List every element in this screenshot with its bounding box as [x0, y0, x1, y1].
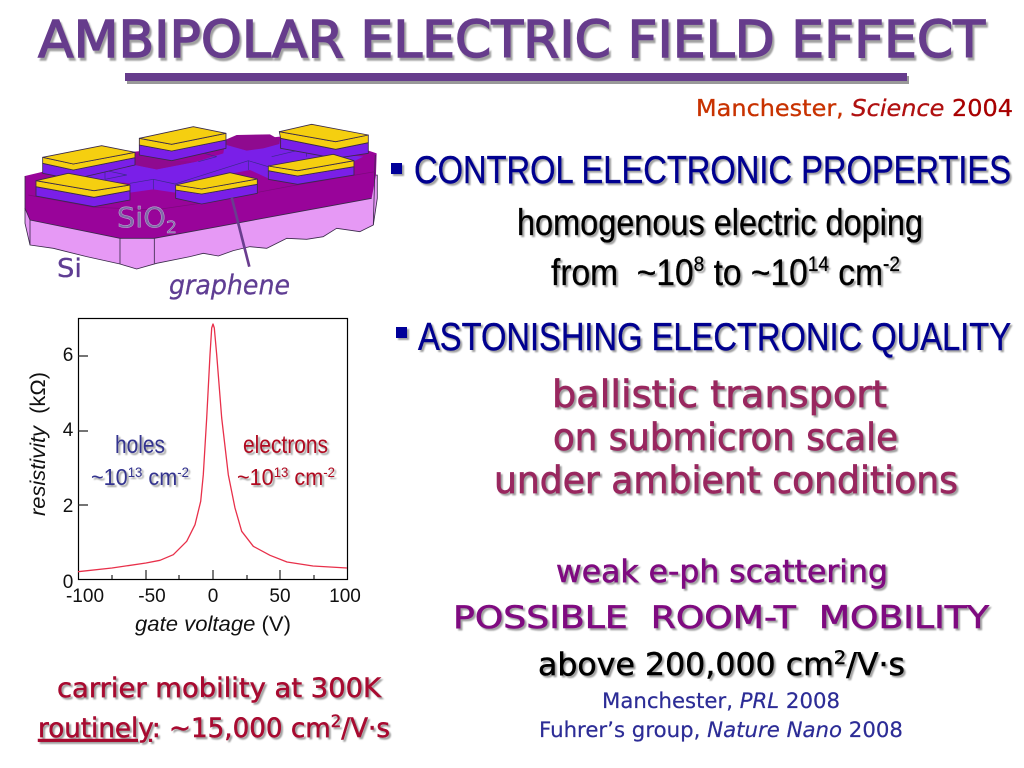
mobility note: /V·s	[341, 713, 390, 744]
y tick labels: 2	[63, 496, 73, 517]
doping text: -2	[883, 253, 900, 276]
holes annotation: ~10	[91, 464, 130, 490]
ballistic transport text: on submicron scale	[553, 416, 898, 459]
citations 2008: Fuhrer’s group, Nature Nano 2008	[539, 718, 903, 742]
mobility note: routinely: ~15,000 cm	[38, 713, 336, 744]
x tick labels	[66, 586, 361, 607]
x tick labels: -100	[66, 586, 104, 607]
y tick labels: 6	[63, 345, 73, 366]
contact: top right	[279, 124, 368, 158]
graphene flake	[73, 140, 363, 193]
x tick labels: 50	[269, 586, 291, 607]
holes annotation	[91, 431, 189, 490]
plot frame	[78, 318, 348, 580]
contact: top left	[43, 146, 135, 179]
electrons annotation: electrons	[243, 431, 328, 459]
electrons annotation: ~10	[237, 464, 276, 490]
doping text: 8	[694, 253, 704, 276]
section: control electronic properties	[391, 149, 1011, 293]
mobility note: 2	[331, 712, 341, 732]
ballistic transport text: ballistic transport	[552, 373, 887, 416]
electrons annotation: -2	[323, 464, 335, 480]
exposed oxide patches	[225, 134, 280, 151]
weak scattering text: POSSIBLE ROOM-T MOBILITY	[453, 600, 989, 636]
mobility value: /V·s	[846, 647, 905, 683]
ballistic transport text: under ambient conditions	[494, 459, 958, 502]
contact: top middle	[139, 127, 226, 161]
electrons annotation: 13	[274, 464, 289, 480]
device diagram	[25, 124, 377, 269]
graphene edge lines	[105, 148, 335, 189]
electrons annotation: cm	[288, 464, 323, 490]
x tick labels: -50	[138, 586, 166, 607]
weak scattering text	[453, 554, 989, 636]
mobility value: above 200,000 cm	[538, 647, 828, 683]
ballistic transport text	[494, 373, 958, 502]
contact: right	[268, 154, 354, 184]
axis ticks	[78, 356, 314, 579]
x tick labels: 0	[208, 586, 218, 607]
y tick labels: 4	[63, 420, 74, 441]
title: AMBIPOLAR ELECTRIC FIELD EFFECT	[38, 11, 986, 70]
silicon substrate	[25, 175, 377, 269]
holes annotation: 13	[128, 464, 143, 480]
holes annotation: cm	[142, 464, 177, 490]
section: astonishing electronic quality	[396, 316, 1011, 742]
label: graphene: graphene	[169, 270, 290, 301]
contact: front middle	[176, 173, 257, 204]
bullet	[391, 163, 402, 174]
doping text: to ~10	[704, 252, 808, 293]
y axis title: resistivity (kΩ)	[27, 372, 50, 516]
mobility value: 2	[834, 647, 846, 669]
doping text	[517, 202, 923, 293]
label: Si: Si	[57, 254, 82, 284]
slab edge lines	[25, 155, 375, 264]
title underline rule	[125, 73, 909, 84]
doping text: cm	[829, 252, 883, 293]
weak scattering text: weak e-ph scattering	[556, 554, 888, 590]
electrons annotation	[237, 431, 335, 490]
label: SiO2: 2	[166, 218, 177, 238]
holes annotation: -2	[177, 464, 189, 480]
label: SiO2: SiO	[117, 201, 165, 234]
mobility note	[38, 673, 390, 744]
citations 2008	[539, 689, 903, 742]
graphene leader line	[232, 197, 249, 267]
doping text: homogenous electric doping	[517, 202, 923, 243]
mobility note: carrier mobility at 300K	[57, 673, 382, 704]
y tick labels	[63, 345, 74, 593]
doping text: 14	[808, 253, 829, 276]
doping text: from ~10	[551, 252, 708, 293]
resistivity curve	[78, 324, 347, 572]
citation: Manchester, Science 2004: Manchester, Science 2004	[696, 96, 1013, 122]
bullet	[396, 327, 407, 338]
x axis title: gate voltage (V)	[135, 613, 291, 636]
x tick labels: 100	[329, 586, 361, 607]
SiO2 layer	[25, 137, 377, 238]
resistivity chart	[27, 318, 361, 636]
contact: front left	[36, 173, 130, 207]
citations 2008: Manchester, PRL 2008	[602, 689, 840, 713]
holes annotation: holes	[115, 431, 165, 459]
y tick labels: 0	[63, 572, 73, 593]
